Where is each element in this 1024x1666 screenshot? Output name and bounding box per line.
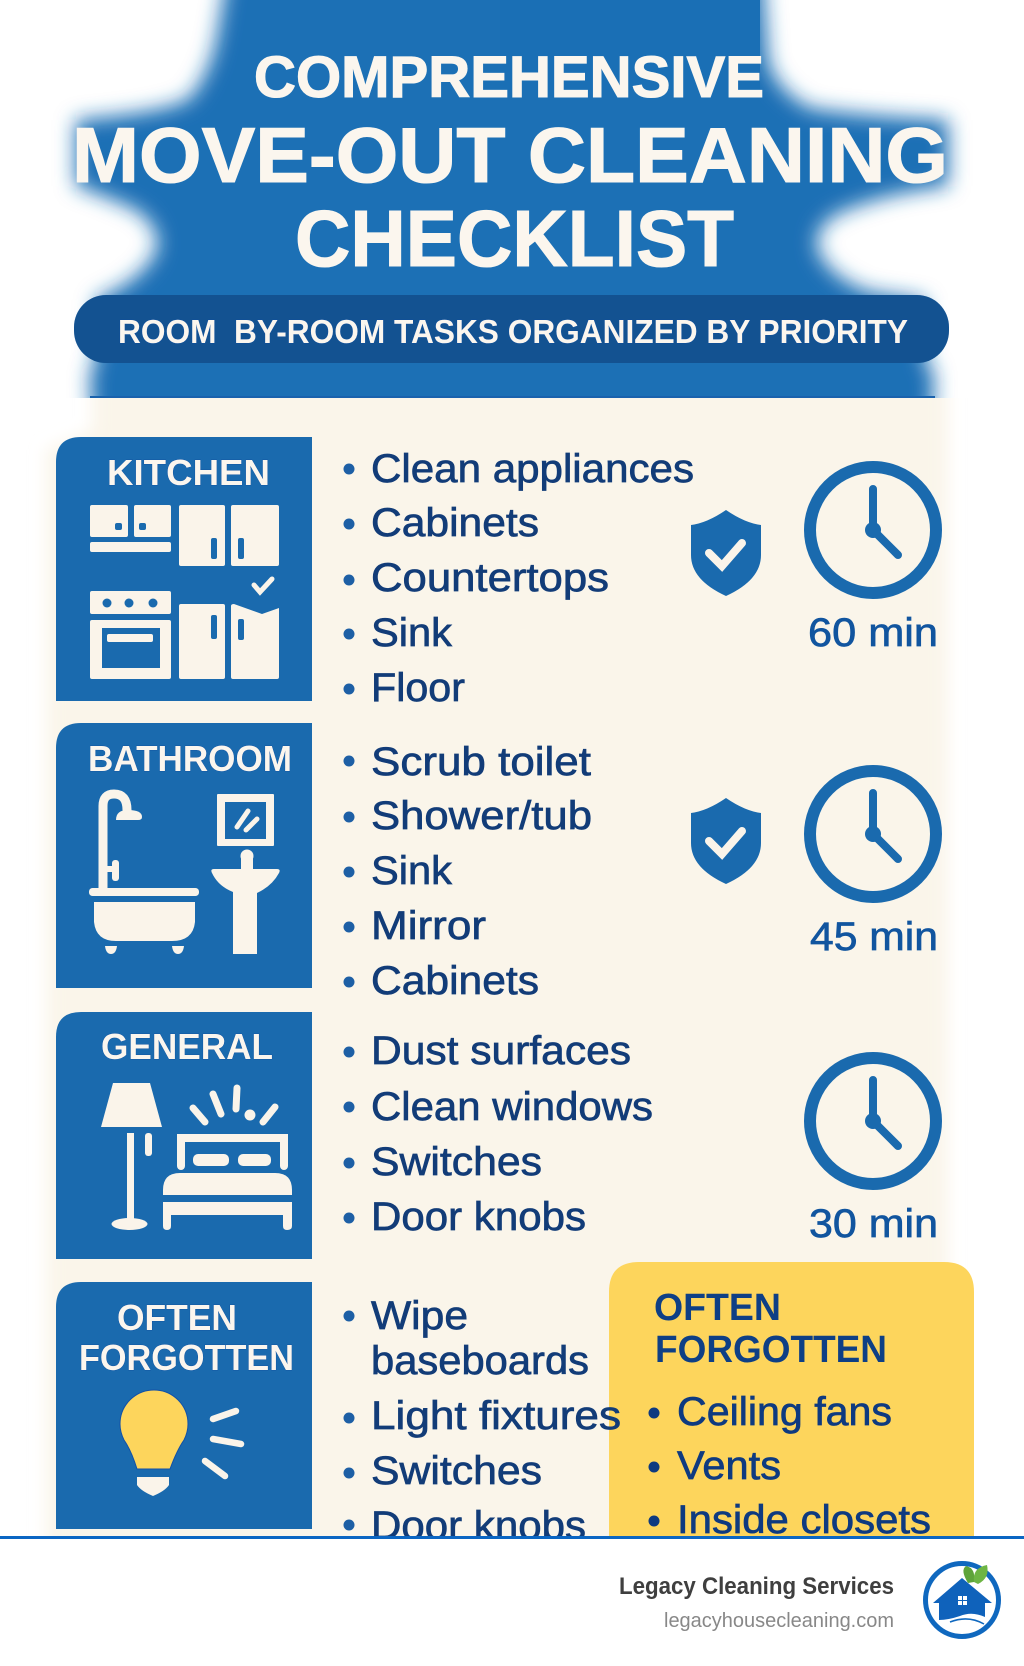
title [72, 45, 948, 283]
list: bathroom tasks [344, 740, 592, 1003]
label: 60 min: 60 min [808, 611, 938, 655]
icon: kitchen cabinets and oven [90, 505, 279, 679]
heading: often forgotten [79, 1297, 294, 1378]
icon: light bulb [120, 1390, 241, 1496]
footer company name: Legacy Cleaning Services [619, 1573, 894, 1600]
title: COMPREHENSIVE [254, 45, 764, 110]
label: 30 min: 30 min [809, 1202, 938, 1246]
list: often forgotten tasks: Door knobs [371, 1504, 586, 1548]
icon: mirror and sink [211, 794, 280, 954]
list: kitchen tasks: Cabinets [371, 501, 539, 545]
list: kitchen tasks: Floor [371, 666, 465, 710]
icon: shield check kitchen [691, 510, 761, 596]
list: bathroom tasks: Sink [371, 849, 453, 893]
panel: often forgotten [56, 1282, 312, 1529]
subtitle pill: ROOM BY-ROOM TASKS ORGANIZED BY PRIORITY [118, 313, 908, 350]
icon: company logo house [926, 1564, 998, 1636]
callout heading: FORGOTTEN [655, 1329, 887, 1371]
panel: bathroom [56, 723, 312, 988]
icon: bed with sparkle [163, 1088, 292, 1230]
list: often forgotten tasks: Switches [371, 1449, 542, 1493]
heading: often forgotten: FORGOTTEN [79, 1337, 294, 1378]
list: often forgotten tasks: Wipe [371, 1294, 468, 1338]
list: bathroom tasks: Scrub toilet [371, 740, 591, 784]
icon: shield check bathroom [691, 798, 761, 884]
list: general tasks: Clean windows [371, 1085, 653, 1129]
heading: general: GENERAL [101, 1026, 273, 1067]
heading: often forgotten: OFTEN [117, 1297, 237, 1338]
list: kitchen tasks: Clean appliances [371, 447, 694, 491]
callout list: Vents [677, 1444, 781, 1488]
callout heading [654, 1287, 887, 1371]
list: bathroom tasks: Cabinets [371, 959, 539, 1003]
list: bathroom tasks: Shower/tub [371, 794, 592, 838]
footer [0, 1536, 1024, 1666]
list: often forgotten tasks: baseboards [371, 1339, 589, 1383]
icon: bathtub with shower [89, 794, 199, 954]
callout: often forgotten yellow card [609, 1262, 974, 1542]
list: kitchen tasks: Countertops [371, 556, 609, 600]
callout list: Inside closets [677, 1498, 931, 1542]
list: often forgotten tasks [344, 1294, 621, 1548]
list: bathroom tasks: Mirror [371, 904, 486, 948]
label: 45 min: 45 min [810, 915, 938, 959]
heading: kitchen: KITCHEN [107, 452, 270, 493]
list: general tasks [344, 1029, 653, 1239]
subtitle pill [74, 295, 949, 363]
list: general tasks: Dust surfaces [371, 1029, 631, 1073]
callout list [648, 1390, 931, 1542]
panel: kitchen [56, 437, 312, 701]
list: often forgotten tasks: Light fixtures [371, 1394, 621, 1438]
icon: clock 30 [810, 1058, 936, 1184]
callout list: Ceiling fans [677, 1390, 892, 1434]
list: general tasks: Switches [371, 1140, 542, 1184]
title: MOVE-OUT CLEANING [72, 111, 948, 199]
callout heading: OFTEN [654, 1287, 781, 1329]
heading: bathroom: BATHROOM [88, 738, 292, 779]
footer url: legacyhousecleaning.com [664, 1609, 894, 1632]
icon: clock 60 [810, 467, 936, 593]
panel: general [56, 1012, 312, 1259]
background: cream sheet [46, 380, 948, 1560]
header banner: blurred blue shape [76, 0, 948, 420]
list: general tasks: Door knobs [371, 1195, 586, 1239]
icon: clock 45 [810, 771, 936, 897]
icon: floor lamp [101, 1083, 162, 1230]
list: kitchen tasks [344, 447, 694, 710]
list: kitchen tasks: Sink [371, 611, 453, 655]
title: CHECKLIST [295, 194, 734, 283]
